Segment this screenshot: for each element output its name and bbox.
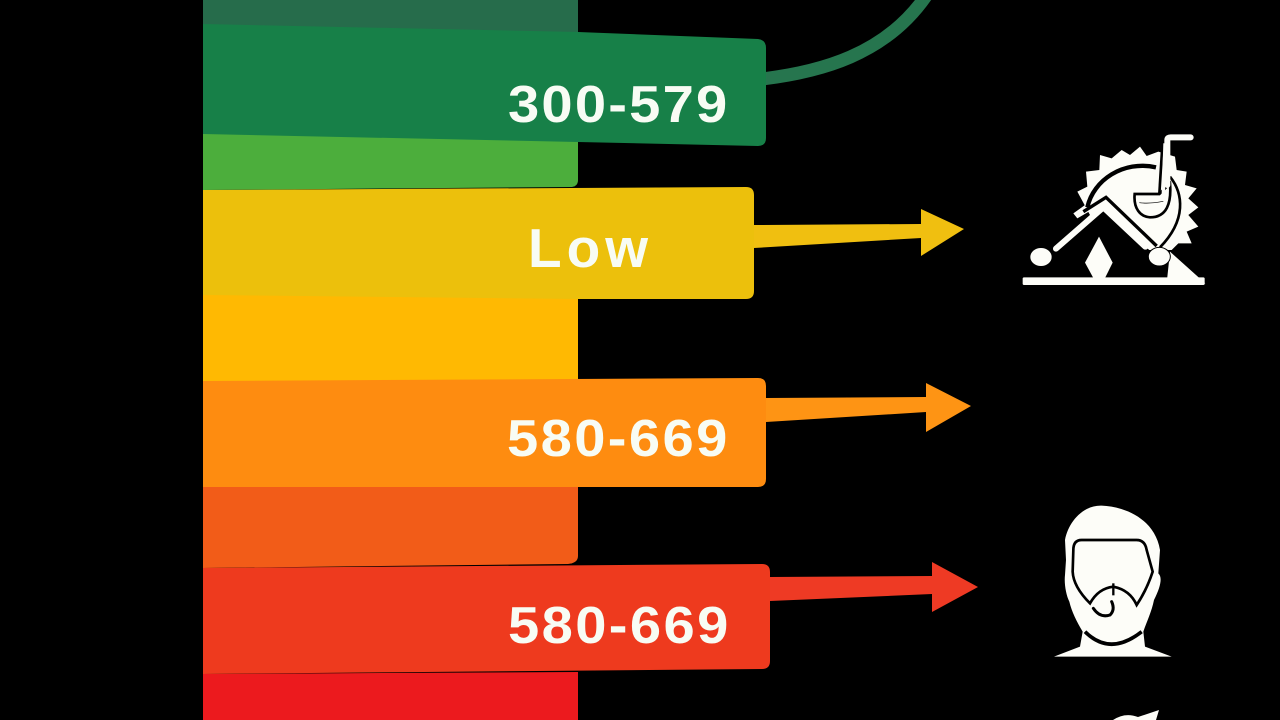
tab: 580-669 orange <box>203 378 766 487</box>
label: Low: Low <box>528 217 648 279</box>
icon: leaf fragment bottom edge <box>1113 710 1159 720</box>
icon: bearded man <box>1054 506 1172 657</box>
icon: gear, roof and golf club <box>1023 137 1205 285</box>
arrow: orange <box>766 383 971 432</box>
band: light green <box>203 130 578 190</box>
label: 580-669 orange: 580-669 <box>507 410 727 468</box>
label: 580-669 red: 580-669 <box>508 597 728 655</box>
band: bottom red <box>203 672 578 720</box>
connector: green curve to off-canvas icon <box>762 0 926 79</box>
label: 300-579: 300-579 <box>508 76 727 134</box>
arrow: red <box>770 562 978 612</box>
band: dark green top <box>203 0 578 34</box>
tab: 580-669 red <box>203 564 770 674</box>
tab: 300-579 <box>203 24 766 146</box>
arrow: yellow <box>754 209 964 256</box>
band: dark orange <box>203 483 578 568</box>
tab: Low <box>203 187 754 299</box>
band: amber <box>203 290 578 382</box>
